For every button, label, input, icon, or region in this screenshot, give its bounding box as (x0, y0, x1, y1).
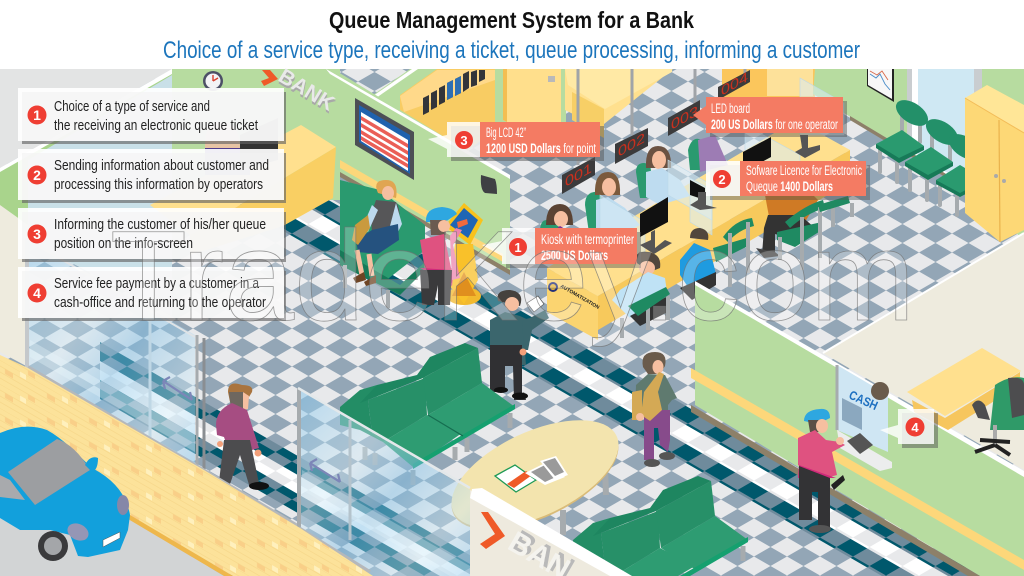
cash window: CASH (847, 388, 880, 413)
step 3 (18, 208, 286, 262)
chair, customer 2 (713, 218, 754, 287)
brochure, orange and grey (525, 456, 568, 485)
partition wall with info screen (326, 69, 510, 275)
callout: cash office: 4 (911, 420, 919, 435)
callout: kiosk (482, 228, 641, 268)
callout: LED board (693, 97, 847, 137)
tall cabinet (965, 85, 1024, 242)
step 2: 2 (33, 167, 41, 183)
operator 3 (636, 146, 690, 205)
step 1: Choice of a type of service and (54, 98, 210, 115)
orange arrow (480, 512, 505, 549)
back desk (565, 69, 673, 138)
front partition with bank sign (470, 488, 632, 576)
step 2: Sending information about customer and (54, 157, 269, 174)
sliding door arrow (163, 377, 192, 400)
standing man with phone (490, 290, 549, 400)
orange bank arrow (261, 70, 278, 86)
customer 2 (680, 228, 716, 300)
callout: LED board: LED board (711, 101, 750, 116)
step 1 (18, 88, 286, 144)
bank sign, back wall: BANK (274, 65, 338, 116)
operator 1 (540, 204, 575, 262)
callout: LED board: 200 US Dollars for one operator (711, 117, 838, 132)
callout: kiosk: 2500 US Dollars (541, 248, 608, 263)
cashier customer (798, 409, 845, 533)
callout: Big LCD: 3 (460, 133, 468, 148)
title: Queue Management System for a Bank (329, 7, 694, 33)
operator 4 (688, 114, 747, 172)
callout: software licence (706, 161, 870, 200)
monitors (640, 135, 820, 254)
glass facade (27, 238, 470, 576)
back room, centre (373, 69, 815, 162)
back cabinet (722, 69, 815, 106)
step 4 (18, 267, 286, 321)
kiosk with customer (420, 203, 483, 305)
seated woman (352, 180, 402, 286)
company logo on counter: AUTOMATIZATION (559, 284, 601, 311)
operator 2 (585, 172, 640, 240)
shelf with binders (400, 69, 495, 162)
reception desk (150, 125, 336, 255)
clock (203, 71, 223, 91)
sliding door arrow (310, 459, 340, 482)
window (907, 69, 982, 196)
street and outer areas, upper left (0, 69, 175, 367)
customer 3 in orange jacket (756, 182, 818, 258)
board 003 (668, 100, 700, 136)
board 001 (562, 157, 595, 194)
back-left office wall (150, 65, 340, 255)
step 4: 4 (33, 285, 41, 301)
info-screen display (355, 98, 414, 180)
callout: cash office (880, 409, 938, 448)
road (0, 443, 224, 576)
office chair (972, 377, 1024, 455)
cashier's desk (907, 348, 1021, 430)
step 1: the receiving an electronic queue ticket (54, 117, 259, 134)
step 1: 1 (33, 107, 41, 123)
callout: software licence: Sofware Licence for Electronic (746, 163, 862, 178)
callout: kiosk: Kiosk with termoprinter (541, 232, 634, 247)
customer 1 (612, 252, 668, 326)
callout: Big LCD (428, 122, 604, 161)
step 3: 3 (33, 226, 41, 242)
left list panel (18, 88, 286, 321)
chair, customer 1 (622, 287, 670, 338)
LED boards with poles (562, 69, 750, 194)
board 004 (718, 69, 750, 100)
customer at kiosk (420, 207, 462, 305)
callout: kiosk: 1 (514, 240, 522, 255)
bank sign, back wall: BANK (275, 67, 339, 118)
kiosk screen (445, 203, 483, 245)
brochure, green (495, 465, 536, 492)
step 2 (18, 149, 286, 203)
waiting chairs (876, 95, 986, 215)
callout: software licence: Queque 1400 Dollars (746, 179, 833, 194)
wall device (481, 175, 497, 194)
callout: software licence: 2 (718, 172, 726, 187)
cashier wall (691, 233, 1024, 576)
sidewalk with brick paving (0, 355, 373, 576)
step 4: cash-office and returning to the operator (54, 294, 266, 311)
board 004: 004 (721, 69, 748, 100)
customers seated at counter (612, 182, 852, 338)
chair, customer 3 (777, 196, 852, 270)
step 4: Service fee payment by a customer in a (54, 275, 260, 292)
main operators counter (547, 120, 850, 340)
board 002 (615, 128, 648, 164)
entrance man (215, 384, 269, 493)
board 003: 003 (671, 103, 698, 134)
green sofa, bottom right (573, 476, 748, 576)
operators seated behind counter (540, 114, 747, 262)
back wall, right (813, 69, 1024, 242)
long green bench (340, 180, 425, 308)
step 2: processing this information by operators (54, 176, 263, 193)
car (0, 427, 130, 561)
step 3: Informing the customer of his/her queue (54, 216, 266, 233)
cash window (837, 365, 892, 471)
callout: Big LCD: 1200 USD Dollars for point (486, 141, 596, 156)
licence plate (103, 532, 120, 547)
green sofa, centre (340, 343, 515, 485)
wall chart (867, 69, 894, 102)
board 002: 002 (618, 130, 645, 161)
board 001: 001 (565, 160, 592, 191)
step 3: position on the info-screen (54, 235, 193, 252)
callout: Big LCD: Big LCD 42” (486, 125, 526, 140)
door (503, 69, 561, 152)
glass dividers on counter (600, 78, 844, 262)
clerk at reception (205, 118, 278, 175)
watermark: TradeKey.com (110, 205, 915, 348)
oval table (436, 398, 634, 552)
kiosk stand (447, 244, 481, 305)
woman with handbag (632, 352, 677, 467)
